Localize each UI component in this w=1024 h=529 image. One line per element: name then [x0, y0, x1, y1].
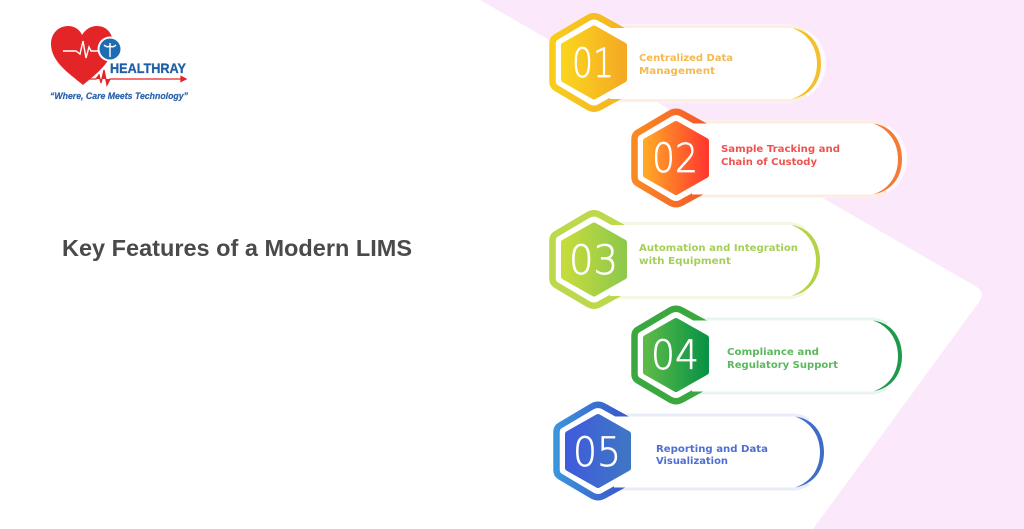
label 01: Centralized Data: [639, 53, 733, 64]
logo heart: [51, 26, 113, 85]
title: Key Features of a Modern LIMS: [62, 235, 412, 261]
label 04: [727, 347, 838, 371]
logo pulse arrow: [89, 70, 186, 85]
hexagon 03: [564, 226, 624, 294]
logo tagline: “Where, Care Meets Technology”: [50, 91, 188, 101]
hexagon 05: [568, 417, 628, 485]
hexagon 01: [564, 28, 624, 96]
hexagon ring 04: [634, 309, 710, 401]
pill 03 accent arc: [791, 225, 820, 296]
pill 05: [614, 416, 824, 488]
step 05: reporting: [556, 405, 829, 497]
label 03: with Equipment: [639, 256, 731, 267]
pill 05 white halo: [578, 413, 829, 491]
hexagon 04: [646, 321, 706, 389]
number 01: 01: [572, 41, 614, 87]
logo wordmark: HEALTHRAY: [110, 60, 187, 76]
label 01: Management: [639, 66, 715, 77]
pill 01 accent arc: [792, 28, 821, 99]
pill 03 pale edges: [610, 224, 805, 298]
label 03: [639, 243, 798, 267]
step 02: sample tracking: [634, 112, 907, 204]
step 04: compliance: [634, 309, 907, 401]
pill 02 pale edges: [692, 122, 887, 196]
step 01: centralized data management: [552, 16, 826, 109]
pill 01 white halo: [574, 24, 826, 102]
label 04: Regulatory Support: [727, 360, 838, 371]
label 02: Sample Tracking and: [721, 144, 840, 155]
label 02: Chain of Custody: [721, 157, 817, 168]
pill 02: [692, 124, 902, 194]
hexagon backing 05: [556, 405, 640, 497]
logo medical badge: [98, 36, 122, 62]
label 04: Compliance and: [727, 347, 819, 358]
hexagon 02: [646, 124, 706, 192]
number 05: 05: [573, 430, 621, 476]
pill 01 pale edges: [610, 26, 806, 100]
pill 03 white halo: [574, 222, 825, 300]
label 05: [656, 444, 768, 467]
hexagon backing 04: [634, 309, 718, 401]
hexagon backing 02: [634, 112, 718, 204]
logo heartbeat line: [63, 41, 100, 58]
pill 04 accent arc: [873, 320, 902, 392]
label 05: Reporting and Data: [656, 444, 768, 455]
hexagon backing 03: [552, 214, 636, 306]
hexagon ring 02: [634, 112, 710, 204]
pill 01: [610, 28, 821, 99]
step 03: automation and integration: [552, 213, 825, 306]
number 03: 03: [569, 238, 618, 284]
pill 04: [692, 320, 902, 392]
pill 02 white halo: [656, 120, 907, 198]
pill 04 white halo: [656, 317, 907, 395]
hexagon backing 01: [552, 16, 636, 108]
pill 05 accent arc: [795, 416, 824, 488]
label 01: [639, 53, 733, 77]
pill 04 pale edges: [692, 319, 887, 393]
pill 02 accent arc: [873, 124, 902, 194]
label 05: Visualization: [656, 456, 728, 467]
number 02: 02: [652, 136, 698, 182]
pill 03: [610, 225, 820, 296]
hexagon ring 03: [552, 213, 628, 306]
hexagon ring 05: [556, 405, 632, 497]
pill 05 pale edges: [614, 415, 809, 489]
logo: [50, 26, 188, 101]
hexagon ring 01: [552, 16, 628, 109]
number 04: 04: [651, 333, 699, 379]
label 02: [721, 144, 840, 168]
label 03: Automation and Integration: [639, 243, 798, 254]
